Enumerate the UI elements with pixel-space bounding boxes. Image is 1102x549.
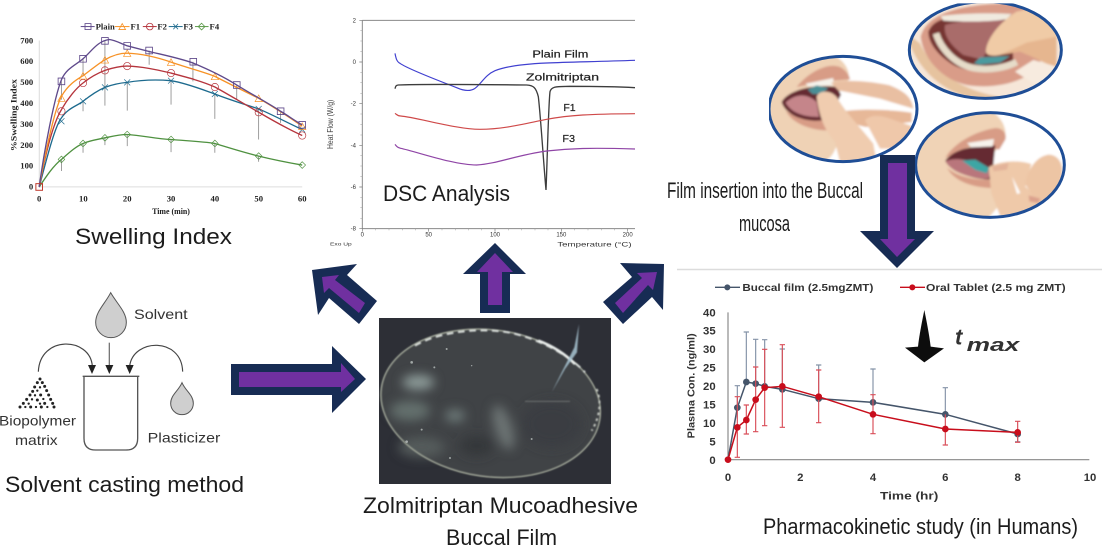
curve: Zolmitriptan xyxy=(395,84,635,190)
icon: biopolymer particles xyxy=(18,377,55,408)
arrow: solvent into beaker xyxy=(105,343,113,374)
DSC axes and ticks: 200 xyxy=(623,233,633,239)
label: Biopolymer matrix: matrix xyxy=(15,432,58,448)
chart axes and tick labels: 20 xyxy=(123,193,132,203)
curve labels: F1 xyxy=(563,103,576,114)
chart axes and tick labels: Plasma Con. (ng/ml) xyxy=(687,333,698,438)
chart legend: F1 xyxy=(131,22,140,32)
chart legend: Buccal film (2.5mgZMT) xyxy=(742,283,873,294)
arrow: tmax marker xyxy=(905,310,944,362)
chart axes and tick labels: 0 xyxy=(725,472,731,484)
chart axes and tick labels: Time (min) xyxy=(152,206,190,216)
curve: F3 xyxy=(395,144,635,165)
heading: film title xyxy=(363,493,638,549)
chart axes and tick labels xyxy=(687,307,1096,503)
photo: mucoadhesive buccal film xyxy=(370,315,611,492)
DSC axes and ticks xyxy=(325,18,635,249)
DSC axes and ticks: -8 xyxy=(351,227,357,233)
DSC axes and ticks: 0 xyxy=(353,60,357,66)
illustration: lower mouth view xyxy=(908,3,1063,100)
chart legend: F2 xyxy=(157,22,167,32)
curve: Plain Film xyxy=(395,53,635,90)
chart axes and tick labels: 0 xyxy=(709,455,716,467)
chart axes and tick labels: 10 xyxy=(79,193,88,203)
arrow: casting to film xyxy=(231,346,366,413)
panel: DSC thermogram xyxy=(325,18,635,249)
ellipse outline xyxy=(909,2,1061,98)
light glare xyxy=(552,324,579,392)
illustration: finger placing film xyxy=(765,52,922,165)
chart axes and tick labels: 60 xyxy=(298,193,307,203)
DSC axes and ticks: -4 xyxy=(351,143,357,149)
series: oral tablet xyxy=(725,383,1021,463)
panel: swelling index chart xyxy=(9,22,307,216)
DSC axes and ticks: 2 xyxy=(353,18,357,24)
chart axes and tick labels: 30 xyxy=(167,193,175,203)
label: Biopolymer matrix: Biopolymer xyxy=(0,413,76,429)
chart axes and tick labels: 600 xyxy=(20,56,33,66)
heading: Swelling Index: Swelling Index xyxy=(75,224,232,249)
arrow: insertion down to pharmacokinetic study xyxy=(860,155,934,268)
text: film insertion caption: mucosa xyxy=(739,211,790,236)
chart axes and tick labels: 500 xyxy=(20,77,33,87)
chart axes and tick labels: 15 xyxy=(703,400,716,412)
chart axes and tick labels: 25 xyxy=(703,363,716,375)
ellipse outline xyxy=(769,56,917,162)
heading: DSC Analysis: DSC Analysis xyxy=(383,181,510,206)
DSC axes and ticks: -2 xyxy=(351,102,357,108)
chart legend: F4 xyxy=(210,22,220,32)
chart axes and tick labels: 40 xyxy=(703,307,716,319)
DSC axes and ticks: 100 xyxy=(490,233,501,239)
arrow: film to swelling index xyxy=(312,264,377,324)
chart axes and tick labels: 30 xyxy=(703,344,716,356)
chart axes and tick labels: 0 xyxy=(29,182,33,192)
series: F2 xyxy=(39,62,306,187)
chart legend: Plain xyxy=(96,22,115,32)
curve labels: Plain Film xyxy=(532,49,588,60)
chart axes and tick labels: 300 xyxy=(20,119,33,129)
DSC axes and ticks: 50 xyxy=(425,233,433,239)
label: tmax: t xyxy=(955,324,964,349)
curve: F1 xyxy=(395,113,635,129)
DSC axes and ticks: Exo Up xyxy=(330,241,352,246)
series: buccal film xyxy=(728,379,1021,460)
chart axes and tick labels: 10 xyxy=(703,418,716,430)
chart axes and tick labels: 200 xyxy=(20,140,33,150)
chart legend xyxy=(81,22,220,32)
curve labels: Zolmitriptan xyxy=(526,72,599,83)
chart axes and tick labels: 2 xyxy=(797,472,803,484)
chart axes and tick labels: 50 xyxy=(254,193,263,203)
arrow: film to DSC xyxy=(463,243,526,313)
DSC axes and ticks: Temperature (°C) xyxy=(557,241,632,249)
chart axes and tick labels: 0 xyxy=(37,193,41,203)
chart axes and tick labels: 4 xyxy=(870,472,877,484)
heading: pharmacokinetic study: Pharmacokinetic study (in Humans) xyxy=(763,514,1078,539)
chart axes and tick labels: 10 xyxy=(1084,472,1096,484)
heading: film title: Zolmitriptan Mucoadhesive xyxy=(363,493,638,518)
arrow: plasticizer into beaker xyxy=(126,345,183,374)
series: F3 xyxy=(39,78,305,187)
chart axes and tick labels: Time (hr) xyxy=(880,491,939,503)
curve labels: F3 xyxy=(562,134,575,145)
icon: plasticizer drop xyxy=(171,383,193,415)
error bars xyxy=(61,41,281,171)
chart axes and tick labels: 40 xyxy=(211,193,219,203)
chart axes and tick labels: 20 xyxy=(703,381,716,393)
chart axes and tick labels: 700 xyxy=(20,36,33,46)
chart axes and tick labels: 100 xyxy=(20,161,33,171)
error bars: buccal film xyxy=(735,332,1020,442)
series: Plain xyxy=(36,38,306,190)
chart legend: Oral Tablet (2.5 mg ZMT) xyxy=(926,283,1066,294)
film specks xyxy=(405,348,533,459)
error bars: oral tablet xyxy=(735,345,1020,457)
chart legend xyxy=(715,283,1066,294)
label: tmax: max xyxy=(967,334,1020,355)
chart axes and tick labels: 6 xyxy=(942,472,948,484)
divider line above pharmacokinetic chart xyxy=(677,268,1102,270)
arrow: film to pharmacokinetics xyxy=(603,263,664,324)
ellipse outline xyxy=(916,113,1064,217)
illustration: film placed on tongue xyxy=(912,108,1069,221)
film disc xyxy=(380,330,601,478)
series: F1 xyxy=(39,50,306,187)
arrow: biopolymer into beaker xyxy=(38,344,96,374)
chart axes and tick labels xyxy=(9,36,307,216)
label: Biopolymer matrix xyxy=(0,413,76,448)
DSC axes and ticks: Heat Flow (W/g) xyxy=(325,100,335,149)
film rim highlights xyxy=(379,328,602,480)
label: Plasticizer: Plasticizer xyxy=(148,429,221,445)
chart axes and tick labels: 35 xyxy=(703,326,716,338)
chart legend: F3 xyxy=(183,22,194,32)
panel: solvent casting diagram xyxy=(0,293,221,450)
label: Solvent: Solvent xyxy=(134,306,188,322)
chart axes and tick labels: %Swelling Index xyxy=(9,78,19,151)
heading: solvent casting method: Solvent casting method xyxy=(5,472,244,497)
chart axes and tick labels: 8 xyxy=(1015,472,1021,484)
panel: pharmacokinetic chart xyxy=(687,283,1096,503)
DSC axes and ticks: -6 xyxy=(351,185,357,191)
DSC axes and ticks: 150 xyxy=(556,233,567,239)
text: film insertion caption: Film insertion into the Buccal xyxy=(667,178,863,203)
icon: solvent drop xyxy=(96,293,126,338)
DSC axes and ticks: 0 xyxy=(361,233,365,239)
series: F4 xyxy=(39,131,306,187)
chart axes and tick labels: 5 xyxy=(709,437,716,449)
icon: beaker xyxy=(83,376,139,450)
chart axes and tick labels: 400 xyxy=(20,98,33,108)
curve labels xyxy=(526,49,599,145)
text: film insertion caption xyxy=(667,178,863,236)
